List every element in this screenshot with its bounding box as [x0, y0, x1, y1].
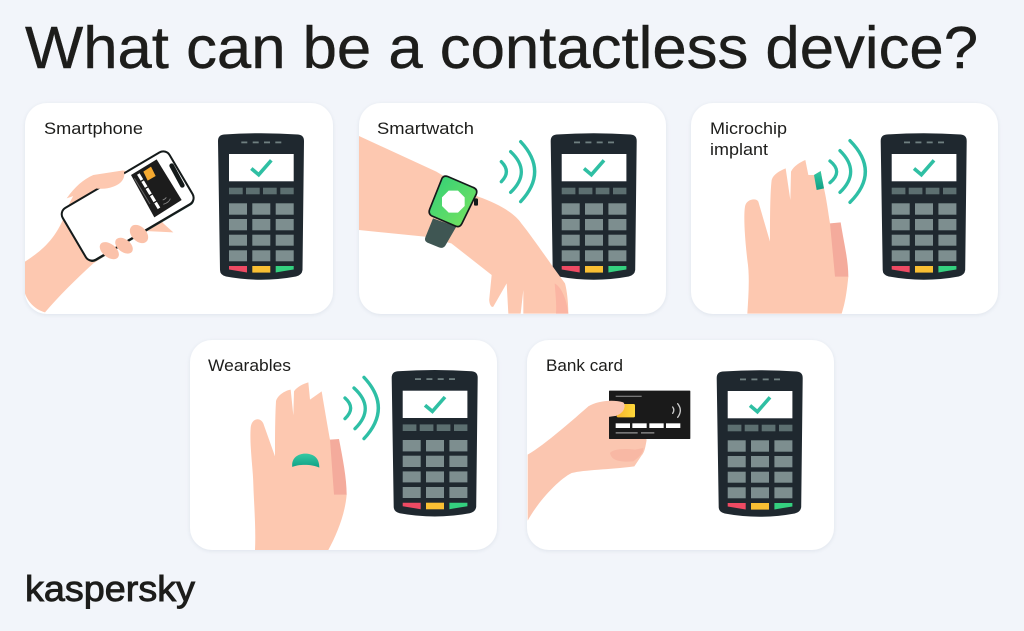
panel: bank card [527, 340, 834, 550]
panel: microchip implant [691, 103, 998, 314]
illustration: hand with smart ring [250, 377, 378, 550]
icon: contactless waves [830, 141, 865, 202]
label: smartwatch: Smartwatch [377, 119, 474, 138]
illustration: hand holding bank card [528, 391, 690, 521]
icon: payment terminal [218, 133, 304, 280]
icon: payment terminal [392, 370, 478, 516]
panel: smartwatch [359, 103, 666, 314]
label: smartphone: Smartphone [44, 119, 143, 138]
icon: payment terminal [717, 370, 803, 517]
label: bank card: Bank card [546, 356, 623, 375]
panel: microchip implant: implant [710, 140, 768, 159]
icon: bank card [609, 391, 690, 439]
title: What can be a contactless device? [25, 15, 978, 81]
icon: payment terminal [881, 133, 967, 280]
label: wearables: Wearables [208, 356, 291, 375]
icon: payment terminal [551, 133, 637, 280]
illustration: hand with microchip [744, 141, 865, 314]
icon: contactless waves [501, 142, 535, 202]
illustration: wrist with smartwatch [359, 136, 568, 314]
icon: implant chip [814, 171, 824, 190]
icon: smart ring [292, 454, 319, 468]
panel: wearables [190, 340, 497, 550]
label: microchip implant: Microchip [710, 119, 787, 138]
icon: contactless waves [345, 377, 378, 439]
logo: kaspersky: kaspersky [25, 568, 195, 609]
illustration: hand holding phone [25, 149, 197, 312]
panel: smartphone [25, 103, 333, 314]
